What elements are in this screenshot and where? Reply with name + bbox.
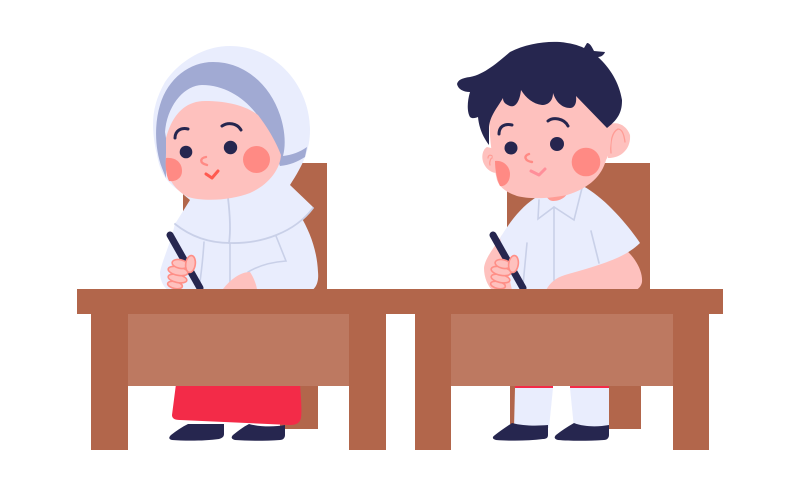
boy trousers and shoes — [493, 384, 609, 441]
chair: girl — [183, 163, 327, 429]
boy arm — [540, 245, 642, 292]
desk: left — [77, 289, 400, 450]
girl figure — [153, 46, 318, 292]
boy figure — [457, 42, 642, 292]
boy hand — [490, 255, 519, 290]
girl eyebrows — [175, 124, 241, 138]
girl skirt and shoes — [169, 384, 301, 441]
boy face — [489, 80, 611, 198]
girl forearm — [223, 272, 257, 289]
girl left cheek — [166, 158, 182, 181]
girl hand — [167, 255, 196, 290]
boy shirt details — [523, 188, 599, 285]
boy shirt — [500, 186, 640, 290]
girl sleeve details — [199, 236, 286, 289]
boy eyebrows — [499, 119, 568, 134]
boy right ear — [607, 123, 630, 158]
boy nose — [525, 154, 532, 162]
boy mouth — [531, 169, 545, 175]
girl eyes — [180, 141, 237, 158]
girl hijab band — [156, 62, 307, 178]
boy left ear — [482, 147, 499, 173]
girl nose — [201, 157, 207, 165]
boy eyes — [504, 137, 564, 154]
desk: right — [400, 289, 723, 450]
girl body — [160, 215, 318, 292]
boy right cheek — [572, 148, 600, 176]
boy neck — [546, 194, 567, 201]
girl inner hood — [165, 85, 258, 150]
girl face — [166, 101, 281, 200]
boy hair — [457, 42, 622, 145]
girl mouth — [206, 171, 218, 178]
boy left cheek — [495, 161, 510, 186]
boy forearm — [484, 235, 515, 290]
boy pen — [493, 235, 523, 288]
girl right cheek — [243, 146, 270, 173]
girl mantle fold — [175, 198, 313, 243]
chair: boy — [507, 163, 650, 429]
girl pen — [170, 235, 200, 288]
girl hijab — [153, 46, 313, 243]
